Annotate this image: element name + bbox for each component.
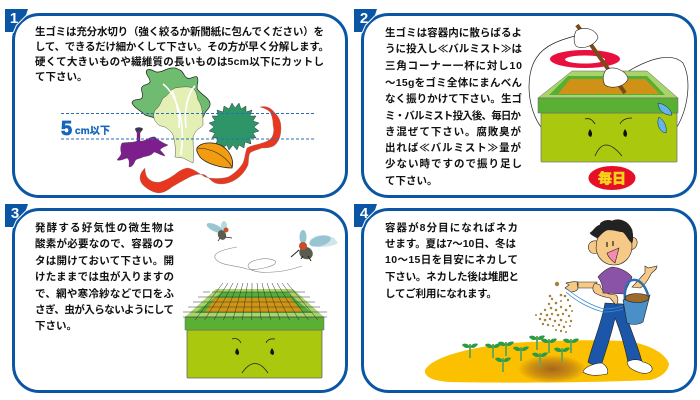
instruction text 2: なく振りかけて下さい。生ゴ xyxy=(385,92,522,105)
instruction text 1: して、できるだけ細かくして下さい。その方が早く分解します。 xyxy=(35,40,329,53)
number tab 4 xyxy=(354,204,377,227)
panel 4: fermented compost xyxy=(354,204,696,392)
instruction text 3: 酸素が必要なので、容器のフ xyxy=(35,237,174,250)
instruction text 3 xyxy=(35,221,174,332)
instruction text 1: 生ゴミは充分水切り（強く絞るか新聞紙に包んでください）を xyxy=(35,25,324,38)
instruction text 2 xyxy=(385,26,522,187)
instruction text 3: 下さい。 xyxy=(35,320,77,332)
5cm guide lines and label: 5 xyxy=(61,118,72,140)
instruction text 1: て下さい。 xyxy=(35,71,88,83)
instruction text 3: 発酵する好気性の微生物は xyxy=(35,221,174,234)
instruction text 2: き混ぜて下さい。腐敗臭が xyxy=(385,125,522,138)
number tab 3: 3 xyxy=(11,205,19,222)
instruction text 3: さぎ、虫が入らないようにして xyxy=(35,303,174,316)
illustration: flies xyxy=(205,221,338,272)
motion lines xyxy=(566,289,623,312)
instruction text 3: タは開けておいて下さい。開 xyxy=(35,255,174,267)
instruction text 2: 三角コーナー一杯に対し10 xyxy=(385,59,522,72)
panel 2: sprinkling Palmist xyxy=(354,9,696,196)
badge: daily: 毎日 xyxy=(598,170,626,186)
instruction text 2: て下さい。 xyxy=(385,175,438,187)
instruction text 1: 硬くて大きいものや繊維質の長いものは5cm以下にカットし xyxy=(35,55,324,68)
instruction text 4 xyxy=(385,221,519,300)
instruction text 2: 出れば≪バルミスト≫量が xyxy=(385,141,522,154)
instruction text 3: で、網や寒冷紗などで口をふ xyxy=(35,287,174,300)
instruction text 1 xyxy=(35,25,329,83)
instruction text 4: 下さい。ネカした後は堆肥と xyxy=(385,270,519,283)
panel 1: cutting food waste xyxy=(5,9,346,196)
number tab 2: 2 xyxy=(360,10,368,27)
illustration: man with bucket xyxy=(565,220,657,375)
panel 3: keep lid open with net xyxy=(5,204,346,392)
instruction text 2: 生ゴミは容器内に散らばるよ xyxy=(385,26,522,39)
5cm guide lines and label xyxy=(61,114,315,140)
instruction text 4: せます。夏は7～10日、冬は xyxy=(385,237,516,250)
illustration: field with seedlings xyxy=(425,335,669,383)
instruction text 2: 少ない時ですので振り足し xyxy=(385,157,522,170)
number tab 1: 1 xyxy=(10,10,18,27)
number tab 1 xyxy=(5,9,28,32)
instruction text 2: ～15gをゴミ全体にまんべん xyxy=(385,76,522,89)
number tab 4: 4 xyxy=(360,205,369,222)
illustration: container covered with net xyxy=(183,283,327,378)
illustration: scattered compost particles xyxy=(535,282,573,333)
illustration: chopped vegetables xyxy=(117,68,281,193)
instruction text 4: してご利用になれます。 xyxy=(385,287,497,300)
instruction text 2: ミ・バルミスト投入後、毎日か xyxy=(385,109,522,122)
number tab 3 xyxy=(5,204,28,227)
instruction text 4: 10～15日を目安にネカして xyxy=(385,253,518,266)
instruction text 3: けたままでは虫が入りますの xyxy=(35,270,174,283)
instruction text 4: 容器が8分目になればネカ xyxy=(385,221,518,234)
badge: daily xyxy=(588,166,636,190)
number tab 2 xyxy=(354,9,377,32)
instruction text 2: うに投入し≪バルミスト≫は xyxy=(385,42,522,55)
5cm guide lines and label: cm以下 xyxy=(75,125,110,137)
illustration: container with stirring stick xyxy=(529,25,688,162)
